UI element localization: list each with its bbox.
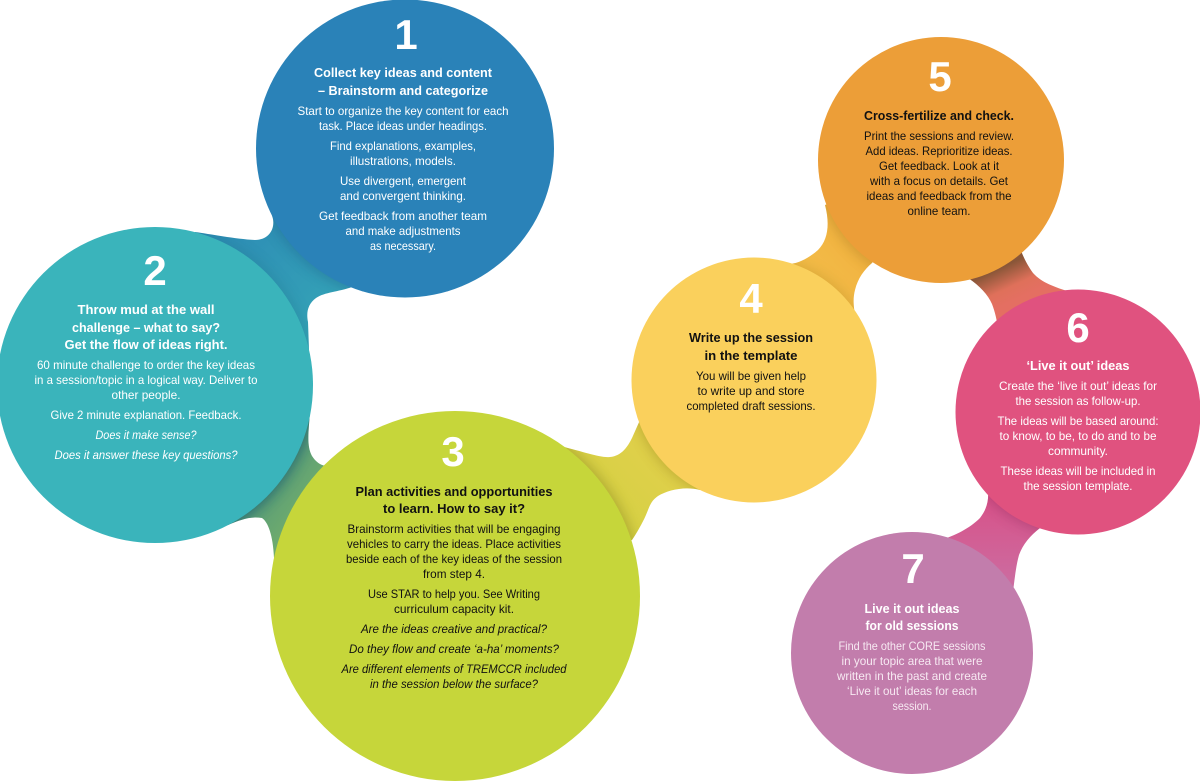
connector: step 4 to step 5 [792, 204, 872, 310]
step 4 heading: in the template [704, 348, 798, 363]
step 3 body text [341, 522, 567, 691]
step 1 number: 1 [394, 11, 418, 58]
step 3 body text: Are the ideas creative and practical? [360, 622, 547, 636]
step 5 circle [818, 37, 1064, 283]
step 7 heading: Live it out ideas [864, 601, 960, 616]
step 2 body text: Give 2 minute explanation. Feedback. [50, 408, 242, 422]
step 7 body text: written in the past and create [836, 669, 987, 683]
step 1 body text: task. Place ideas under headings. [319, 119, 487, 133]
step 4 heading: Write up the session [689, 330, 813, 345]
panel: step 7 [791, 532, 1033, 774]
step 4 heading [689, 330, 813, 363]
panel: step 5 [818, 37, 1064, 283]
panel: step 1 [256, 0, 554, 298]
step 6 number: 6 [1066, 304, 1090, 351]
step 3 body text: beside each of the key ideas of the session [346, 552, 562, 566]
step 3 body text: Use STAR to help you. See Writing [368, 587, 540, 601]
step 3 body text: curriculum capacity kit. [394, 602, 514, 616]
step 6 body text: to know, to be, to do and to be [1000, 429, 1157, 443]
step 6 body text: the session as follow-up. [1016, 394, 1140, 408]
step 3 heading [356, 484, 552, 516]
step 4 body text: completed draft sessions. [686, 399, 816, 413]
step 7 circle [791, 532, 1033, 774]
step 2 body text: other people. [112, 388, 180, 402]
step 5 body text: online team. [908, 204, 970, 218]
step 5 body text: ideas and feedback from the [866, 189, 1012, 203]
step 5 heading: Cross-fertilize and check. [864, 108, 1014, 123]
step 1 body text: and convergent thinking. [340, 189, 466, 203]
step 5 body text: Get feedback. Look at it [879, 159, 1000, 173]
step 1 circle [256, 0, 554, 298]
step 6 body text: community. [1048, 444, 1108, 458]
step 5 body text: with a focus on details. Get [869, 174, 1009, 188]
step 2 circle [0, 227, 313, 543]
step 7 body text: Find the other CORE sessions [838, 639, 986, 653]
step 2 heading [64, 302, 228, 352]
step 7 body text: in your topic area that were [842, 654, 983, 668]
step 2 heading: Get the flow of ideas right. [64, 337, 228, 352]
step 1 body text [298, 104, 508, 253]
step 1 body text: illustrations, models. [350, 154, 456, 168]
step 1 body text: Get feedback from another team [319, 209, 487, 223]
step 1 body text: as necessary. [370, 239, 436, 253]
step 6 body text: Create the ‘live it out’ ideas for [999, 379, 1157, 393]
step 3 body text: Do they flow and create ‘a-ha’ moments? [349, 642, 559, 656]
step 4 body text [686, 369, 816, 413]
step 7 number: 7 [901, 545, 925, 592]
step 7 heading [864, 601, 960, 633]
panel: step 3 [270, 411, 640, 781]
step 7 body text: ‘Live it out’ ideas for each [847, 684, 977, 698]
connector: step 3 to step 4 [564, 422, 700, 540]
step 6 body text: the session template. [1024, 479, 1132, 493]
panel: step 6 [956, 290, 1200, 534]
connector: step 6 to step 7 [948, 495, 1040, 588]
step 6 body text: These ideas will be included in [1000, 464, 1156, 478]
step 2 body text: in a session/topic in a logical way. Deliver to [34, 373, 258, 387]
connector: step 1 to step 2 [195, 196, 352, 350]
step 2 body text: Does it make sense? [96, 428, 197, 442]
step 3 body text: from step 4. [423, 567, 485, 581]
step 1 heading: – Brainstorm and categorize [318, 83, 488, 98]
step 1 body text: Use divergent, emergent [340, 174, 467, 188]
connector: step 2 to step 3 [228, 416, 324, 558]
step 5 body text: Print the sessions and review. [864, 129, 1014, 143]
step 2 heading: challenge – what to say? [72, 320, 220, 335]
step 5 body text [864, 129, 1014, 218]
step 3 circle [270, 411, 640, 781]
step 6 circle [956, 290, 1200, 534]
step 7 heading: for old sessions [866, 618, 958, 633]
step 3 body text: vehicles to carry the ideas. Place activities [347, 537, 561, 551]
step 1 heading: Collect key ideas and content [314, 65, 493, 80]
step 4 number: 4 [739, 275, 763, 322]
step 6 heading: ‘Live it out’ ideas [1026, 358, 1130, 373]
step 1 body text: Start to organize the key content for each [298, 104, 508, 118]
step 7 body text: session. [892, 699, 932, 713]
step 2 heading: Throw mud at the wall [78, 302, 214, 317]
connector: step 5 to step 6 [970, 252, 1066, 320]
step 1 body text: and make adjustments [346, 224, 461, 238]
step 3 number: 3 [441, 428, 465, 475]
step 1 body text: Find explanations, examples, [330, 139, 476, 153]
step 6 body text: The ideas will be based around: [998, 414, 1158, 428]
step 4 body text: You will be given help [696, 369, 806, 383]
step 3 body text: Are different elements of TREMCCR included [341, 662, 567, 676]
step 4 body text: to write up and store [698, 384, 805, 398]
step 2 body text: 60 minute challenge to order the key ideas [37, 358, 255, 372]
step 5 body text: Add ideas. Reprioritize ideas. [866, 144, 1012, 158]
panel: step 4 [632, 258, 876, 502]
step 3 heading: to learn. How to say it? [383, 501, 525, 516]
step 2 body text: Does it answer these key questions? [54, 448, 238, 462]
step 4 circle [632, 258, 876, 502]
step 3 heading: Plan activities and opportunities [356, 484, 552, 499]
step 3 body text: in the session below the surface? [370, 677, 538, 691]
step 1 heading [314, 65, 493, 98]
step 7 body text [836, 639, 987, 713]
step 6 body text [998, 379, 1158, 493]
step 5 number: 5 [928, 53, 952, 100]
step 2 body text [34, 358, 258, 462]
step 2 number: 2 [143, 247, 167, 294]
step 3 body text: Brainstorm activities that will be engaging [348, 522, 560, 536]
panel: step 2 [0, 227, 313, 543]
